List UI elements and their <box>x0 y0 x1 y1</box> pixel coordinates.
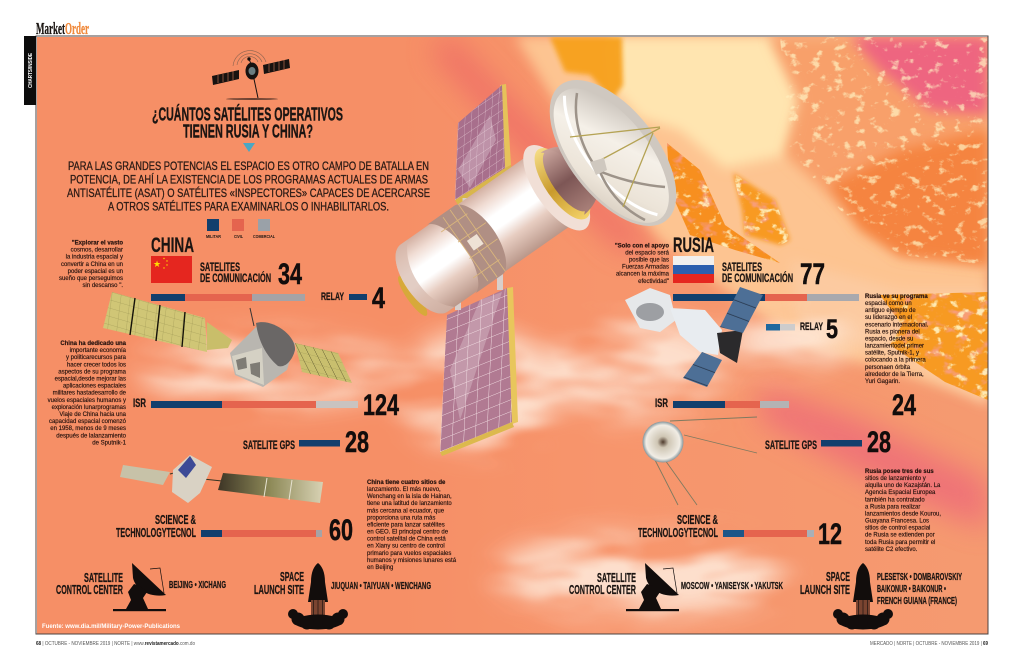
china body text: hacer crecer todos los <box>67 362 126 368</box>
intro text: POTENCIA, DE AHÍ LA EXISTENCIA DE LOS PROGRAMAS ACTUALES DE ARMAS <box>70 172 428 186</box>
russia body text: antiguo ejemplo de <box>865 308 916 314</box>
china quote: cosmos, desarrollar <box>71 248 123 254</box>
china body text: en 1958, menos de 9 meses <box>50 426 126 432</box>
satellite image: china science <box>120 455 323 503</box>
icon: dish <box>113 563 166 611</box>
main satellite illustration <box>376 58 701 456</box>
china launch sites text: China tiene cuatro sitios de <box>367 480 446 486</box>
china gps <box>243 426 369 459</box>
russia comms label: DE COMUNICACIÓN <box>722 272 793 285</box>
russia body text: escenario internacional. <box>865 322 929 328</box>
icon: dish <box>626 563 679 611</box>
icon: rocket <box>833 563 893 630</box>
russia quote: Fuerzas Armadas <box>622 265 669 271</box>
china science row <box>116 513 353 547</box>
bottom solar panel <box>440 268 518 456</box>
russia science row: 12 <box>818 518 842 551</box>
legend: MILITAR <box>206 234 222 239</box>
china heading: CHINA <box>151 234 194 257</box>
russia quote: posible que las <box>629 258 669 264</box>
intro text: ANTISATÉLITE (ASAT) O SATÉLITES «INSPECTORES» CAPACES DE ACERCARSE <box>67 185 430 200</box>
russia launch sites text: Guayana Francesa. Los <box>865 519 929 525</box>
china quote: poder espacial es un <box>68 269 123 275</box>
russia launch sites text: Rusia posee tres de sus <box>865 469 934 475</box>
china body text: de Sputnik-1 <box>92 440 127 446</box>
russia body text: espacial como un <box>865 301 912 307</box>
china control center: CONTROL CENTER <box>56 583 123 597</box>
china body text: China ha dedicado una <box>60 341 127 347</box>
footer right: MERCADO | NORTE | OCTUBRE - NOVIEMBRE 2019 | 69 <box>870 641 988 647</box>
china science row: TECHNOLOGYTECNOL <box>116 526 196 540</box>
intro text: A OTROS SATÉLITES PARA EXAMINARLOS O INHABILITARLOS. <box>108 198 389 214</box>
china control center: SATELLITE <box>84 571 123 585</box>
china launch sites text: en Beijing <box>367 565 393 571</box>
russia relay <box>766 314 838 344</box>
china body text: Viaje de China hacia una <box>59 412 127 418</box>
russia comms bar <box>673 294 859 301</box>
china body text: aspectos de su programa <box>58 369 127 375</box>
china relay: 4 <box>372 282 385 315</box>
atmosphere glow <box>430 36 660 250</box>
front ring and lens <box>511 135 603 241</box>
russia comms label <box>722 262 793 285</box>
russia body text: satélite, Sputnik-1, y <box>865 351 919 357</box>
russia launch site: PLESETSK • DOMBAROVSKIY <box>877 572 962 583</box>
russia body text: espacio, desde su <box>865 336 913 342</box>
russia science row: TECHNOLOGYTECNOL <box>638 526 718 540</box>
russia quote: del espacio será <box>625 251 670 257</box>
china body text: capacidad espacial comenzó <box>49 419 127 425</box>
russia isr: 24 <box>892 389 916 422</box>
china launch site: LAUNCH SITE <box>254 583 304 597</box>
russia science row: SCIENCE & <box>677 513 718 527</box>
russia gps: 28 <box>867 426 891 459</box>
russia body text: colocando a la primera <box>865 358 926 364</box>
icon: china flag: ★ <box>153 259 161 269</box>
satellite image: soyuz <box>625 287 763 387</box>
china control center: BEIJING • XICHANG <box>169 580 226 591</box>
china control center <box>56 563 226 611</box>
russia body text: alrededor de la Tierra, <box>865 372 924 378</box>
russia launch site: LAUNCH SITE <box>800 583 850 597</box>
china body text: militares hastadesarrollo de <box>53 391 127 397</box>
satellite image: china orbiter <box>103 292 352 387</box>
russia launch site: FRENCH GUIANA (FRANCE) <box>877 596 957 607</box>
china isr: ISR <box>133 396 146 410</box>
top solar panel <box>455 84 512 218</box>
source note: Fuente: www.dia.mil/Military-Power-Publications <box>42 623 180 630</box>
intro text: PARA LAS GRANDES POTENCIAS EL ESPACIO ES OTRO CAMPO DE BATALLA EN <box>68 159 429 173</box>
china launch site <box>254 563 431 630</box>
china science row: SCIENCE & <box>155 513 196 527</box>
russia body text: lanzamientodel primer <box>865 344 924 350</box>
russia launch sites text: de Rusia se extienden por <box>865 533 935 539</box>
russia body text: Rusia es pionera del <box>865 329 920 335</box>
russia comms number: 77 <box>800 258 825 291</box>
china comms label: SATELITES <box>200 262 240 274</box>
china launch site: JIUQUAN • TAIYUAN • WENCHANG <box>331 581 431 592</box>
icon: china flag <box>151 256 192 283</box>
section tab: CHARTS/INSIDE <box>28 52 34 88</box>
icon: title marker <box>243 143 255 152</box>
dish <box>525 58 701 248</box>
china quote: "Explorar el vasto <box>72 240 123 246</box>
russia body text: Rusia ve su programa <box>865 294 928 300</box>
icon: rocket <box>288 563 348 630</box>
intro text <box>67 159 430 214</box>
russia launch sites text: satélite C2 efectivo. <box>865 547 918 553</box>
russia quote: "Solo con el apoyo <box>615 244 669 250</box>
china launch sites text: control satelital de China está <box>367 537 446 543</box>
header logo: MarketOrder <box>36 19 89 38</box>
russia launch sites text: sitios de control espacial <box>865 526 930 532</box>
china launch sites text: en Xiany su centro de control <box>367 544 445 550</box>
russia launch sites text: toda Rusia para permitir el <box>865 540 935 546</box>
russia isr <box>655 389 916 422</box>
china quote: convertir a China en un <box>61 262 123 268</box>
china isr: 124 <box>363 389 399 422</box>
china launch sites text: proporciona una ruta más <box>367 515 435 521</box>
russia science row <box>638 513 842 551</box>
russia launch sites text: sitios de lanzamiento y <box>865 476 926 482</box>
russia launch sites text: también ha contratado <box>865 497 925 503</box>
russia launch site: BAIKONUR • BAIKONUR • <box>877 584 946 595</box>
russia comms label: SATELITES <box>722 262 762 274</box>
title: ¿CUÁNTOS SATÉLITES OPERATIVOS <box>152 104 343 124</box>
russia heading: RUSIA <box>673 234 714 257</box>
china isr <box>133 389 399 422</box>
russia control center <box>569 563 783 611</box>
china gps: SATELITE GPS <box>243 440 295 452</box>
russia launch sites text: lanzamientos desde Kourou, <box>865 511 941 517</box>
russia body text: personaen órbita <box>865 365 911 371</box>
body cylinder <box>376 123 620 335</box>
china body text: y politicarecursos para <box>66 355 127 361</box>
russia quote: efectividad" <box>638 279 669 285</box>
russia control center: CONTROL CENTER <box>569 583 636 597</box>
russia body text: su liderazgo en el <box>865 315 912 321</box>
china launch sites text: lanzamiento. El más nuevo, <box>367 487 441 493</box>
china body text: aplicaciones espaciales <box>63 384 126 390</box>
russia launch site <box>800 563 962 630</box>
china science row: 60 <box>329 514 353 547</box>
russia launch sites text: Agencia Espacial Europea <box>865 490 936 496</box>
china launch sites text: Wenchang en la isla de Hainan, <box>367 494 452 500</box>
china comms bar <box>151 294 305 301</box>
china body text: importante economía <box>70 348 127 354</box>
footer left: 68 | OCTUBRE - NOVIEMBRE 2019 | NORTE | www.revistamercado.com.do <box>36 641 195 647</box>
legend: CIVIL <box>234 234 243 239</box>
china quote: sueño que perseguimos <box>59 276 123 282</box>
china relay <box>321 282 385 315</box>
china quote: la industria espacial y <box>66 255 123 261</box>
russia isr: ISR <box>655 396 668 410</box>
china comms label: DE COMUNICACIÓN <box>200 272 271 285</box>
russia gps <box>765 426 891 459</box>
satellite image: sputnik <box>642 417 757 505</box>
russia relay: RELAY <box>800 321 823 333</box>
china body text: exploración lunarprogramas <box>52 405 126 411</box>
china launch sites text: en GEO. El principal centro de <box>367 530 449 536</box>
china launch sites text: eficiente para lanzar satélites <box>367 522 445 528</box>
russia gps: SATELITE GPS <box>765 440 817 452</box>
china body text: después de lalanzamiento <box>56 433 127 439</box>
legend <box>206 219 275 239</box>
china gps: 28 <box>345 426 369 459</box>
china body text: espacial,desde mejorar las <box>55 376 126 382</box>
title <box>152 104 343 142</box>
china comms label <box>200 262 271 285</box>
china launch sites text: tiene una latitud de lanzamiento <box>367 501 452 507</box>
china quote: sin descanso ". <box>82 283 123 289</box>
russia launch sites text: a Rusia para realizar <box>865 504 920 510</box>
legend: COMERCIAL <box>253 234 275 239</box>
china relay: RELAY <box>321 291 344 303</box>
china launch sites text: primario para vuelos espaciales <box>367 551 451 557</box>
china launch site: SPACE <box>280 570 304 584</box>
icon: russia flag <box>673 256 714 283</box>
russia body text: Yuri Gagarin. <box>865 379 900 385</box>
china body text: vuelos espaciales humanos y <box>48 398 126 404</box>
china launch sites text: humanos y misiones lunares está <box>367 558 457 564</box>
china comms number: 34 <box>278 258 302 291</box>
icon: satellite <box>212 51 290 100</box>
russia quote: alcancen la máxima <box>616 272 670 278</box>
russia launch site: SPACE <box>826 570 850 584</box>
russia control center: SATELLITE <box>597 571 636 585</box>
title: TIENEN RUSIA Y CHINA? <box>183 120 313 142</box>
russia control center: MOSCOW • YANISEYSK • YAKUTSK <box>681 581 783 592</box>
russia relay: 5 <box>826 314 838 344</box>
russia launch sites text: alquila uno de Kazajstán. La <box>865 483 941 489</box>
china launch sites text: más cercana al ecuador, que <box>367 508 445 514</box>
section tab <box>24 36 36 105</box>
